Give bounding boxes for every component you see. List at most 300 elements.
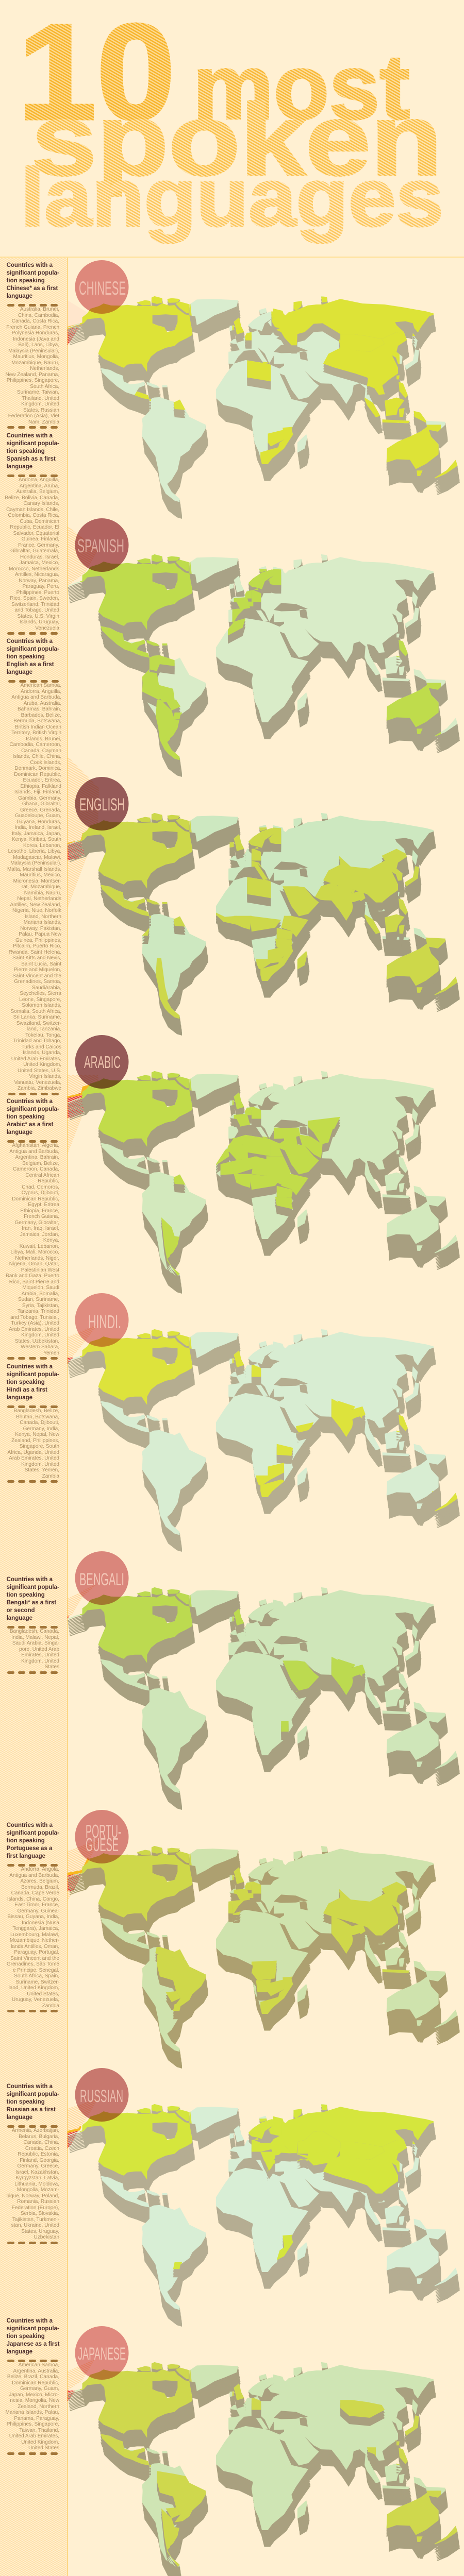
heading: Hindi: Hindi as a first <box>7 1387 47 1393</box>
title: 10 <box>18 0 175 148</box>
heading: Arabic <box>6 1098 59 1136</box>
list: English: Micronesia, Montser- <box>13 878 61 884</box>
list: English: Leone, Singapore, <box>19 997 61 1003</box>
divider <box>7 474 58 477</box>
list: Chinese: New Zealand, Panama, <box>5 372 59 378</box>
list: English: Mauritius, Mexico, <box>20 872 61 878</box>
list: Arabic: Arabia, Somalia, <box>22 1291 59 1297</box>
list: English: Malaysia (Peninsular), <box>10 860 61 866</box>
list: Arabic: Dominican Republic, <box>12 1196 59 1202</box>
list: Arabic: Cyprus, Djibouti, <box>22 1190 59 1196</box>
title: spoken <box>31 83 442 196</box>
list: Hindi: Bangladesh, Belize, <box>14 1408 59 1414</box>
list: English: Kenya, Kiribati, South <box>12 837 61 842</box>
list: Arabic: Bank and Gaza, Puerto <box>6 1273 59 1279</box>
list: Spanish: Paraguay, Peru, <box>22 584 59 589</box>
list: English: Dominican Republic, <box>14 772 61 777</box>
list: English: Aruba, Australia, <box>24 701 61 706</box>
list: Spanish: Gibraltar, Guatemala, <box>10 548 59 554</box>
list: Portuguese: Mozambique, Nether- <box>10 1938 59 1943</box>
map: Chinese: CHINESE <box>79 278 126 299</box>
list: Chinese: Kingdom, United <box>21 401 59 407</box>
list: Spanish: Argentina, Aruba, <box>20 483 59 489</box>
list: Portuguese: Azores, Belgium, <box>20 1878 59 1884</box>
title: languages <box>21 151 443 243</box>
heading: Bengali: significant popula- <box>7 1584 59 1590</box>
list: Portuguese: Uruguay, Venezuela, <box>12 1997 59 2003</box>
list: Arabic: Antigua and Barbuda, <box>9 1149 59 1155</box>
list: Arabic: Palestinian West <box>21 1267 59 1273</box>
list: Portuguese: United States, <box>27 1991 59 1997</box>
list: Chinese: South Africa, <box>30 384 59 389</box>
list: Spanish: Australia, Belgium, <box>16 489 59 495</box>
panel: English countries <box>6 638 61 1095</box>
list: Russian: Kyrgyzstan, Latvia, <box>16 2175 59 2181</box>
list: Arabic: Argentina, Bahrain, <box>15 1155 59 1160</box>
list: Russian: Romania, Russian <box>17 2199 59 2205</box>
list: Arabic: French Guiana, <box>24 1214 59 1219</box>
list: English: Korea, Lebanon, <box>23 843 61 849</box>
list: Spanish: Honduras, Israel, <box>20 554 59 560</box>
list: Chinese: French Guiana, French <box>6 325 59 330</box>
divider <box>7 1357 58 1360</box>
list: Bengali: pore, United Arab <box>19 1647 59 1652</box>
list: Portuguese: Paraguay, Portugal, <box>14 1950 59 1955</box>
list: Spanish: and Tobago, United <box>14 607 59 613</box>
list: Russian: States, Uruguay, <box>21 2229 59 2234</box>
list: English: Tokelau, Tonga, <box>25 1032 61 1038</box>
list: Spanish: France, Germany, <box>18 543 59 548</box>
list: Hindi: Germany, India, <box>23 1426 59 1432</box>
list: English: Islands, Fiji, Finland, <box>14 789 61 795</box>
list: Arabic: Afghanistan, Algeria, <box>12 1143 59 1148</box>
list: Chinese: Thailand, United <box>22 396 59 401</box>
heading: Russian <box>0 2082 67 2122</box>
list: Russian: Lithuania, Moldova, <box>14 2181 59 2187</box>
list: Russian: Armenia, Azerbaijan, <box>12 2128 59 2133</box>
list: Spanish: Islands, Uruguay, <box>20 619 59 625</box>
list: English: Saint Kitts and Nevis, <box>12 955 61 961</box>
list: Arabic: Syria, Tajikistan, <box>22 1303 59 1309</box>
list: Bengali: Saudi Arabia, Singa- <box>12 1640 59 1646</box>
list: English: Swaziland, Switzer- <box>16 1021 61 1026</box>
list: Russian: bique, Norway, Poland, <box>6 2193 59 2199</box>
map: German <box>0 2560 464 2576</box>
list: Spanish: Belize, Bolivia, Canada, <box>5 495 59 501</box>
divider <box>7 304 58 307</box>
list: English: Palau, Papua New <box>19 931 61 937</box>
heading: English: English as a first <box>7 662 54 668</box>
list: Japanese: United Arab Emirates, <box>9 2433 59 2439</box>
list: English: Gambia, Germany, <box>18 795 61 801</box>
list: Russian: Mongolia, Mozam- <box>17 2187 59 2193</box>
divider <box>0 2010 67 2012</box>
map: English <box>68 756 460 1036</box>
panel: Japanese countries <box>0 2317 67 2454</box>
list: Arabic: Yemen <box>43 1350 59 1356</box>
list: English: Antilles, New Zealand, <box>10 902 61 908</box>
list: English: Saint Vincent and the <box>12 973 61 979</box>
map: Chinese <box>68 260 460 519</box>
divider <box>7 426 58 429</box>
list: Arabic: Netherlands, Niger, <box>15 1256 59 1261</box>
heading: Bengali: language <box>7 1615 32 1621</box>
heading: Japanese <box>0 2317 67 2355</box>
list: Hindi: Singapore, South <box>20 1444 59 1449</box>
list: Japanese: Philippines, Singapore, <box>7 2421 59 2427</box>
heading: Chinese: significant popula- <box>7 270 59 276</box>
list: English: Solomon Islands, <box>22 1003 61 1008</box>
map: Bengali: BENGALI <box>79 1570 124 1589</box>
list: Hindi: Africa, Uganda, United <box>7 1450 59 1455</box>
list: Russian: Tajikistan, Turkmeni- <box>12 2217 59 2223</box>
list: English: Ethiopia, Falkland <box>21 784 61 789</box>
heading: Bengali <box>6 1577 59 1621</box>
map: Spanish <box>68 518 460 777</box>
divider <box>0 2125 67 2128</box>
list: English: Norway, Pakistan, <box>20 926 61 931</box>
list: Japanese: Panama, Paraguay, <box>14 2416 59 2421</box>
list: Japanese: American Samoa, <box>19 2362 59 2368</box>
panel: Bengali countries <box>6 1577 59 1674</box>
list: Japanese: Argentina, Australia, <box>13 2368 59 2374</box>
heading: Portuguese <box>0 1822 67 1860</box>
list: English: Andorra, Anguilla, <box>21 689 61 694</box>
divider <box>7 1405 58 1408</box>
heading: Hindi <box>6 1363 59 1400</box>
list: English: Namibia, Nauru, <box>24 890 61 896</box>
list: Spanish: Colombia, Costa Rica, <box>8 513 59 518</box>
list: English: Bermuda, Botswana, <box>13 718 61 724</box>
list: Chinese: Suriname, Taiwan, <box>17 389 59 395</box>
list: English: Pierre and Miquelon, <box>14 967 61 973</box>
heading: Hindi: Countries with a <box>7 1363 53 1369</box>
list: Chinese: Canada, Costa Rica, <box>12 318 59 324</box>
list: English: Zambia, Zimbabwe <box>18 1086 61 1091</box>
list: Arabic: Kingdom, United <box>21 1332 59 1338</box>
list: English: United States, U.S. <box>18 1068 61 1074</box>
list: English: Saint Lucia, Saint <box>21 961 61 967</box>
heading: Spanish: significant popula- <box>7 440 59 446</box>
list: English: Guadeloupe, Guam, <box>15 813 61 819</box>
list: Russian: Uzbekistan <box>34 2234 59 2240</box>
panel: Arabic countries <box>6 1098 59 1360</box>
list: English: Nepal, Netherlands <box>17 896 61 902</box>
list: Japanese: Mariana Islands, Palau, <box>5 2410 59 2415</box>
list: Portuguese: Saint Vincent and the <box>10 1956 59 1961</box>
list: Portuguese: East Timor, France, <box>14 1902 59 1908</box>
divider <box>8 680 59 683</box>
list: Japanese: Zealand, Northern <box>18 2404 59 2410</box>
list: Arabic: Germany, Gibraltar, <box>14 1220 59 1226</box>
list: Portuguese: lands Antilles, Oman, <box>11 1944 59 1950</box>
list: English: Ecuador, Eritrea, <box>23 777 61 783</box>
heading: Portuguese: Countries with a <box>7 1822 53 1828</box>
list: English: Madagascar, Malawi, <box>13 855 61 860</box>
list: Spanish: Antilles, Nicaragua, <box>15 572 59 578</box>
list: Arabic: Belgium, Belize, <box>22 1161 59 1166</box>
heading: Spanish: Spanish as a first <box>7 455 56 462</box>
list: English: Guyana, Honduras, <box>16 819 61 825</box>
list: English: Virgin Islands, <box>29 1074 61 1079</box>
divider <box>0 2452 67 2454</box>
panel: Portuguese countries <box>0 1822 67 2012</box>
map: Hindi <box>68 1293 460 1552</box>
list: Russian: stan, Ukraine, United <box>11 2223 59 2228</box>
divider <box>7 1140 58 1143</box>
list: Portuguese: Grenadines, São Tomé <box>7 1961 59 1967</box>
title: most <box>193 36 410 138</box>
list: Chinese: Federation (Asia), Viet <box>8 413 59 419</box>
list: Chinese: Bali), Laos, Libya, <box>19 342 59 348</box>
list: Arabic: Republic, <box>38 1178 59 1184</box>
heading: Portuguese: Portuguese as a <box>7 1845 52 1852</box>
list: Hindi: Arab Emirates, United <box>9 1455 59 1461</box>
list: Spanish: Salvador, Equatorial <box>13 531 59 536</box>
list: Hindi: Zealand, Philippines, <box>11 1438 59 1444</box>
list: Spanish: Philippines, Puerto <box>16 590 59 596</box>
heading: English <box>6 638 59 675</box>
heading: Portuguese: significant popula- <box>7 1830 59 1836</box>
list: English: India, Ireland, Israel, <box>14 825 61 831</box>
list: Portuguese: Tenggara), Jamaica, <box>12 1926 59 1931</box>
heading: English: language <box>7 669 32 675</box>
list: English: Antigua and Barbuda, <box>11 694 61 700</box>
list: Arabic: States, Uzbekistan, <box>15 1338 59 1344</box>
list: Russian: Republic, Estonia, <box>18 2151 59 2157</box>
list: English: Rwanda, Saint Helena, <box>9 950 61 955</box>
heading: Russian: Countries with a <box>7 2083 53 2090</box>
list: Chinese: Philippines, Singapore, <box>7 378 59 383</box>
list: Arabic: Tanzania, Trinidad <box>18 1309 59 1314</box>
list: Arabic: Iran, Iraq, Israel, <box>22 1226 59 1231</box>
list: Hindi: Canada, Djibouti, <box>20 1420 59 1426</box>
list: English: Vanuatu, Venezuela, <box>14 1080 61 1086</box>
list: Japanese: United States <box>28 2445 59 2451</box>
list: Hindi: Kenya, Nepal, New <box>15 1432 59 1437</box>
list: Portuguese: Germany, Guinea- <box>17 1908 59 1914</box>
divider <box>7 632 58 635</box>
list: Hindi <box>7 1408 59 1479</box>
list: Spanish: Cuba, Dominican <box>20 519 59 524</box>
list: Arabic: Libya, Mali, Morocco, <box>11 1249 59 1255</box>
list: Portuguese: Andorra, Angola, <box>21 1867 59 1872</box>
heading: Spanish: Countries with a <box>7 433 53 439</box>
list: English: Denmark, Dominica, <box>14 766 61 771</box>
map: Portuguese <box>68 1810 460 2069</box>
list: English: Guinea, Philippines, <box>15 938 61 943</box>
heading: Japanese: significant popula- <box>7 2326 59 2332</box>
heading: Russian: tion speaking <box>7 2099 45 2105</box>
list: Spanish: Norway, Panama, <box>19 578 59 584</box>
list: English: Malta, Marshall Islands, <box>7 867 61 872</box>
heading: Chinese: Countries with a <box>7 262 53 268</box>
list: English: rat, Mozambique, <box>22 884 61 890</box>
divider <box>0 2241 67 2244</box>
heading: Japanese: Japanese as a first <box>7 2341 60 2347</box>
list: English: Turks and Caicos <box>22 1044 61 1050</box>
heading: Chinese: tion speaking <box>7 277 45 283</box>
list: Japanese: Taiwan, Thailand, <box>19 2428 59 2433</box>
list: Spanish: Morocco, Netherlands <box>9 566 59 572</box>
list: Arabic: and Tobago, Tunisia , <box>10 1315 59 1320</box>
list: English: Island, Northern <box>25 914 61 920</box>
divider <box>0 1864 67 1866</box>
heading: English: significant popula- <box>7 646 59 652</box>
list: Portuguese: Indonesia (Nusa <box>22 1920 59 1926</box>
list: Arabic: Rico, Saint Pierre and <box>9 1279 59 1285</box>
list: Spanish <box>5 477 59 631</box>
heading: Russian: Russian as a first <box>7 2106 56 2112</box>
list: Spanish: Venezuela <box>35 625 59 631</box>
heading: English: Countries with a <box>7 638 53 644</box>
list: Chinese: China, Cambodia, <box>18 313 59 318</box>
list: Arabic: Ethiopia, France, <box>20 1208 59 1214</box>
panel: Hindi countries <box>6 1363 59 1483</box>
list: Portuguese <box>0 1867 67 2009</box>
list: Arabic: Cameroon, Canada, <box>13 1166 59 1172</box>
list: Arabic: Miquelón, Saudi <box>22 1285 59 1291</box>
list: English: Territory, British Virgin <box>11 730 61 736</box>
heading: Arabic: Countries with a <box>7 1098 53 1105</box>
list: Bengali: Bangladesh, Canada, <box>10 1629 59 1634</box>
list: English: Ghana, Gibraltar, <box>22 801 61 807</box>
list: Russian: Finland, Georgia, <box>20 2158 59 2163</box>
list: Japanese <box>0 2362 67 2451</box>
list: English: Grenadines, Samoa, <box>14 979 61 985</box>
list: English: Canada, Cayman <box>21 748 61 754</box>
list: Portuguese: e Príncipe, Senegal, <box>13 1968 59 1973</box>
list: Spanish: Republic, Ecuador, El <box>10 524 59 530</box>
list: Japanese: Dominican Republic, <box>12 2380 59 2386</box>
list: English: Islands, Chile, China, <box>12 754 61 759</box>
list: Arabic: Sudan, Suriname, <box>18 1297 59 1302</box>
heading: Japanese: language <box>7 2348 32 2354</box>
heading: Spanish: language <box>7 464 32 470</box>
list: Arabic: Kenya, <box>43 1238 59 1243</box>
divider <box>7 1480 58 1483</box>
list: Chinese <box>5 307 59 425</box>
list: English: Bahamas, Bahrain, <box>18 706 61 712</box>
list: Arabic: Egypt, Eritrea <box>28 1202 59 1208</box>
list: Arabic: Jamaica, Jordan, <box>20 1232 59 1238</box>
list: Japanese: Japan, Mexico, Micro- <box>9 2392 59 2398</box>
list: Russian: Germany, Greece, <box>17 2163 59 2169</box>
list: Bengali: Emirates, United <box>21 1652 59 1658</box>
map: Arabic: ARABIC <box>84 1053 121 1072</box>
list: Chinese: Nam, Zambia <box>28 419 59 425</box>
map: Hindi: HINDI. <box>88 1311 121 1332</box>
list: Spanish: Canary Islands, <box>24 501 59 506</box>
heading: Bengali: tion speaking <box>7 1592 45 1598</box>
list: Chinese: Malaysia (Peninsular), <box>8 348 59 354</box>
list: English: Pitcairn, Puerto Rico, <box>13 943 61 949</box>
map: Russian: RUSSIAN <box>80 2087 123 2106</box>
list: English: land, Tanzania, <box>27 1026 61 1032</box>
list: Hindi: States, Yemen, <box>25 1467 59 1473</box>
panel: Russian countries <box>0 2082 67 2244</box>
divider <box>0 2360 67 2362</box>
list: Hindi: Zambia <box>42 1473 59 1479</box>
list: English: British Indian Ocean <box>15 724 61 730</box>
divider <box>8 1093 59 1095</box>
heading: Chinese: language <box>7 293 32 299</box>
list: English: Lesotho, Liberia, Libya, <box>8 849 61 854</box>
list: English: SaudiArabia, <box>32 985 61 991</box>
list: Spanish: Rico, Spain, Sweden, <box>10 596 59 601</box>
list: Portuguese: Bissau, Guyana, India, <box>7 1914 59 1920</box>
divider <box>7 1626 58 1629</box>
list: Chinese: Polynesia Honduras, <box>12 330 59 336</box>
list: English: Seychelles, Sierra <box>20 991 61 996</box>
map: Spanish: SPANISH <box>77 535 124 556</box>
list: Chinese: Indonesia (Java and <box>13 336 59 342</box>
list: Russian: Canada, China, <box>24 2140 59 2145</box>
list: English: Cambodia, Cameroon, <box>9 742 61 748</box>
list: Portuguese: Bermuda, Brazil, <box>21 1885 59 1890</box>
heading: Portuguese: first language <box>7 1853 45 1859</box>
list: Portuguese: South Africa, Spain, <box>14 1973 59 1979</box>
list: Portuguese: Zambia <box>42 2003 59 2009</box>
list: English: United Arab Emirates, <box>11 1056 61 1062</box>
list: English: Islands, Uganda, <box>23 1050 61 1056</box>
list: Spanish: States, U.S. Virgin <box>17 614 59 619</box>
heading: Chinese: Chinese* as a first <box>7 285 58 292</box>
heading: Japanese: Countries with a <box>7 2317 53 2324</box>
panel: Chinese countries <box>5 262 59 429</box>
heading: Hindi: significant popula- <box>7 1371 59 1378</box>
list: Arabic: Nigeria, Oman, Qatar, <box>9 1261 59 1267</box>
list: Japanese: Germany, Guam, <box>20 2386 59 2392</box>
list: Portuguese: land, United Kingdom, <box>9 1985 59 1991</box>
list: Arabic: Chad, Comoros, <box>22 1184 59 1190</box>
list: Chinese: Mozambique, Nauru, <box>11 360 59 366</box>
heading: Chinese <box>6 262 59 299</box>
list: Arabic: Kuwait, Lebanon, <box>20 1244 59 1249</box>
list: Russian: Croatia, Czech <box>25 2146 59 2151</box>
heading: Russian: language <box>7 2114 32 2121</box>
heading: Spanish: tion speaking <box>7 448 45 454</box>
list: Hindi: Kingdom, United <box>21 1462 59 1467</box>
list: Spanish: Switzerland, Trinidad <box>11 602 59 607</box>
list: Arabic: Central African <box>25 1173 59 1178</box>
list: Bengali: States <box>45 1664 59 1670</box>
heading: Spanish <box>6 433 59 470</box>
list: Japanese: nesia, Mongolia, New <box>10 2398 59 2403</box>
list: Chinese: States, Russian <box>23 408 59 413</box>
map: Japanese <box>68 2326 460 2576</box>
map: Russian <box>68 2068 460 2327</box>
list: Portuguese: Islands, China, Congo, <box>7 1896 59 1902</box>
list: Arabic <box>6 1143 59 1356</box>
list: English: Islands, Brunei, <box>26 736 61 742</box>
list: Russian: Belarus, Bulgaria, <box>19 2134 59 2140</box>
heading: Arabic: Arabic* as a first <box>7 1121 53 1127</box>
list: English: Cook Islands, <box>30 760 61 766</box>
list: Arabic: Turkey (Asia), United <box>11 1320 59 1326</box>
heading: Portuguese: tion speaking <box>7 1837 45 1843</box>
heading: Bengali: Bengali* as a first <box>7 1599 56 1605</box>
heading: English: tion speaking <box>7 653 45 659</box>
list: Russian: Serbia, Slovakia, <box>21 2211 59 2216</box>
heading: Russian: significant popula- <box>7 2091 59 2097</box>
list: Bengali <box>10 1629 59 1670</box>
list: Japanese: Belize, Brazil, Canada, <box>7 2374 59 2380</box>
title <box>18 0 443 244</box>
panel: country lists sidebar <box>0 258 68 2576</box>
map: Japanese: JAPANESE <box>78 2344 126 2364</box>
list: Portuguese: Canada, Cape Verde <box>11 1890 59 1896</box>
